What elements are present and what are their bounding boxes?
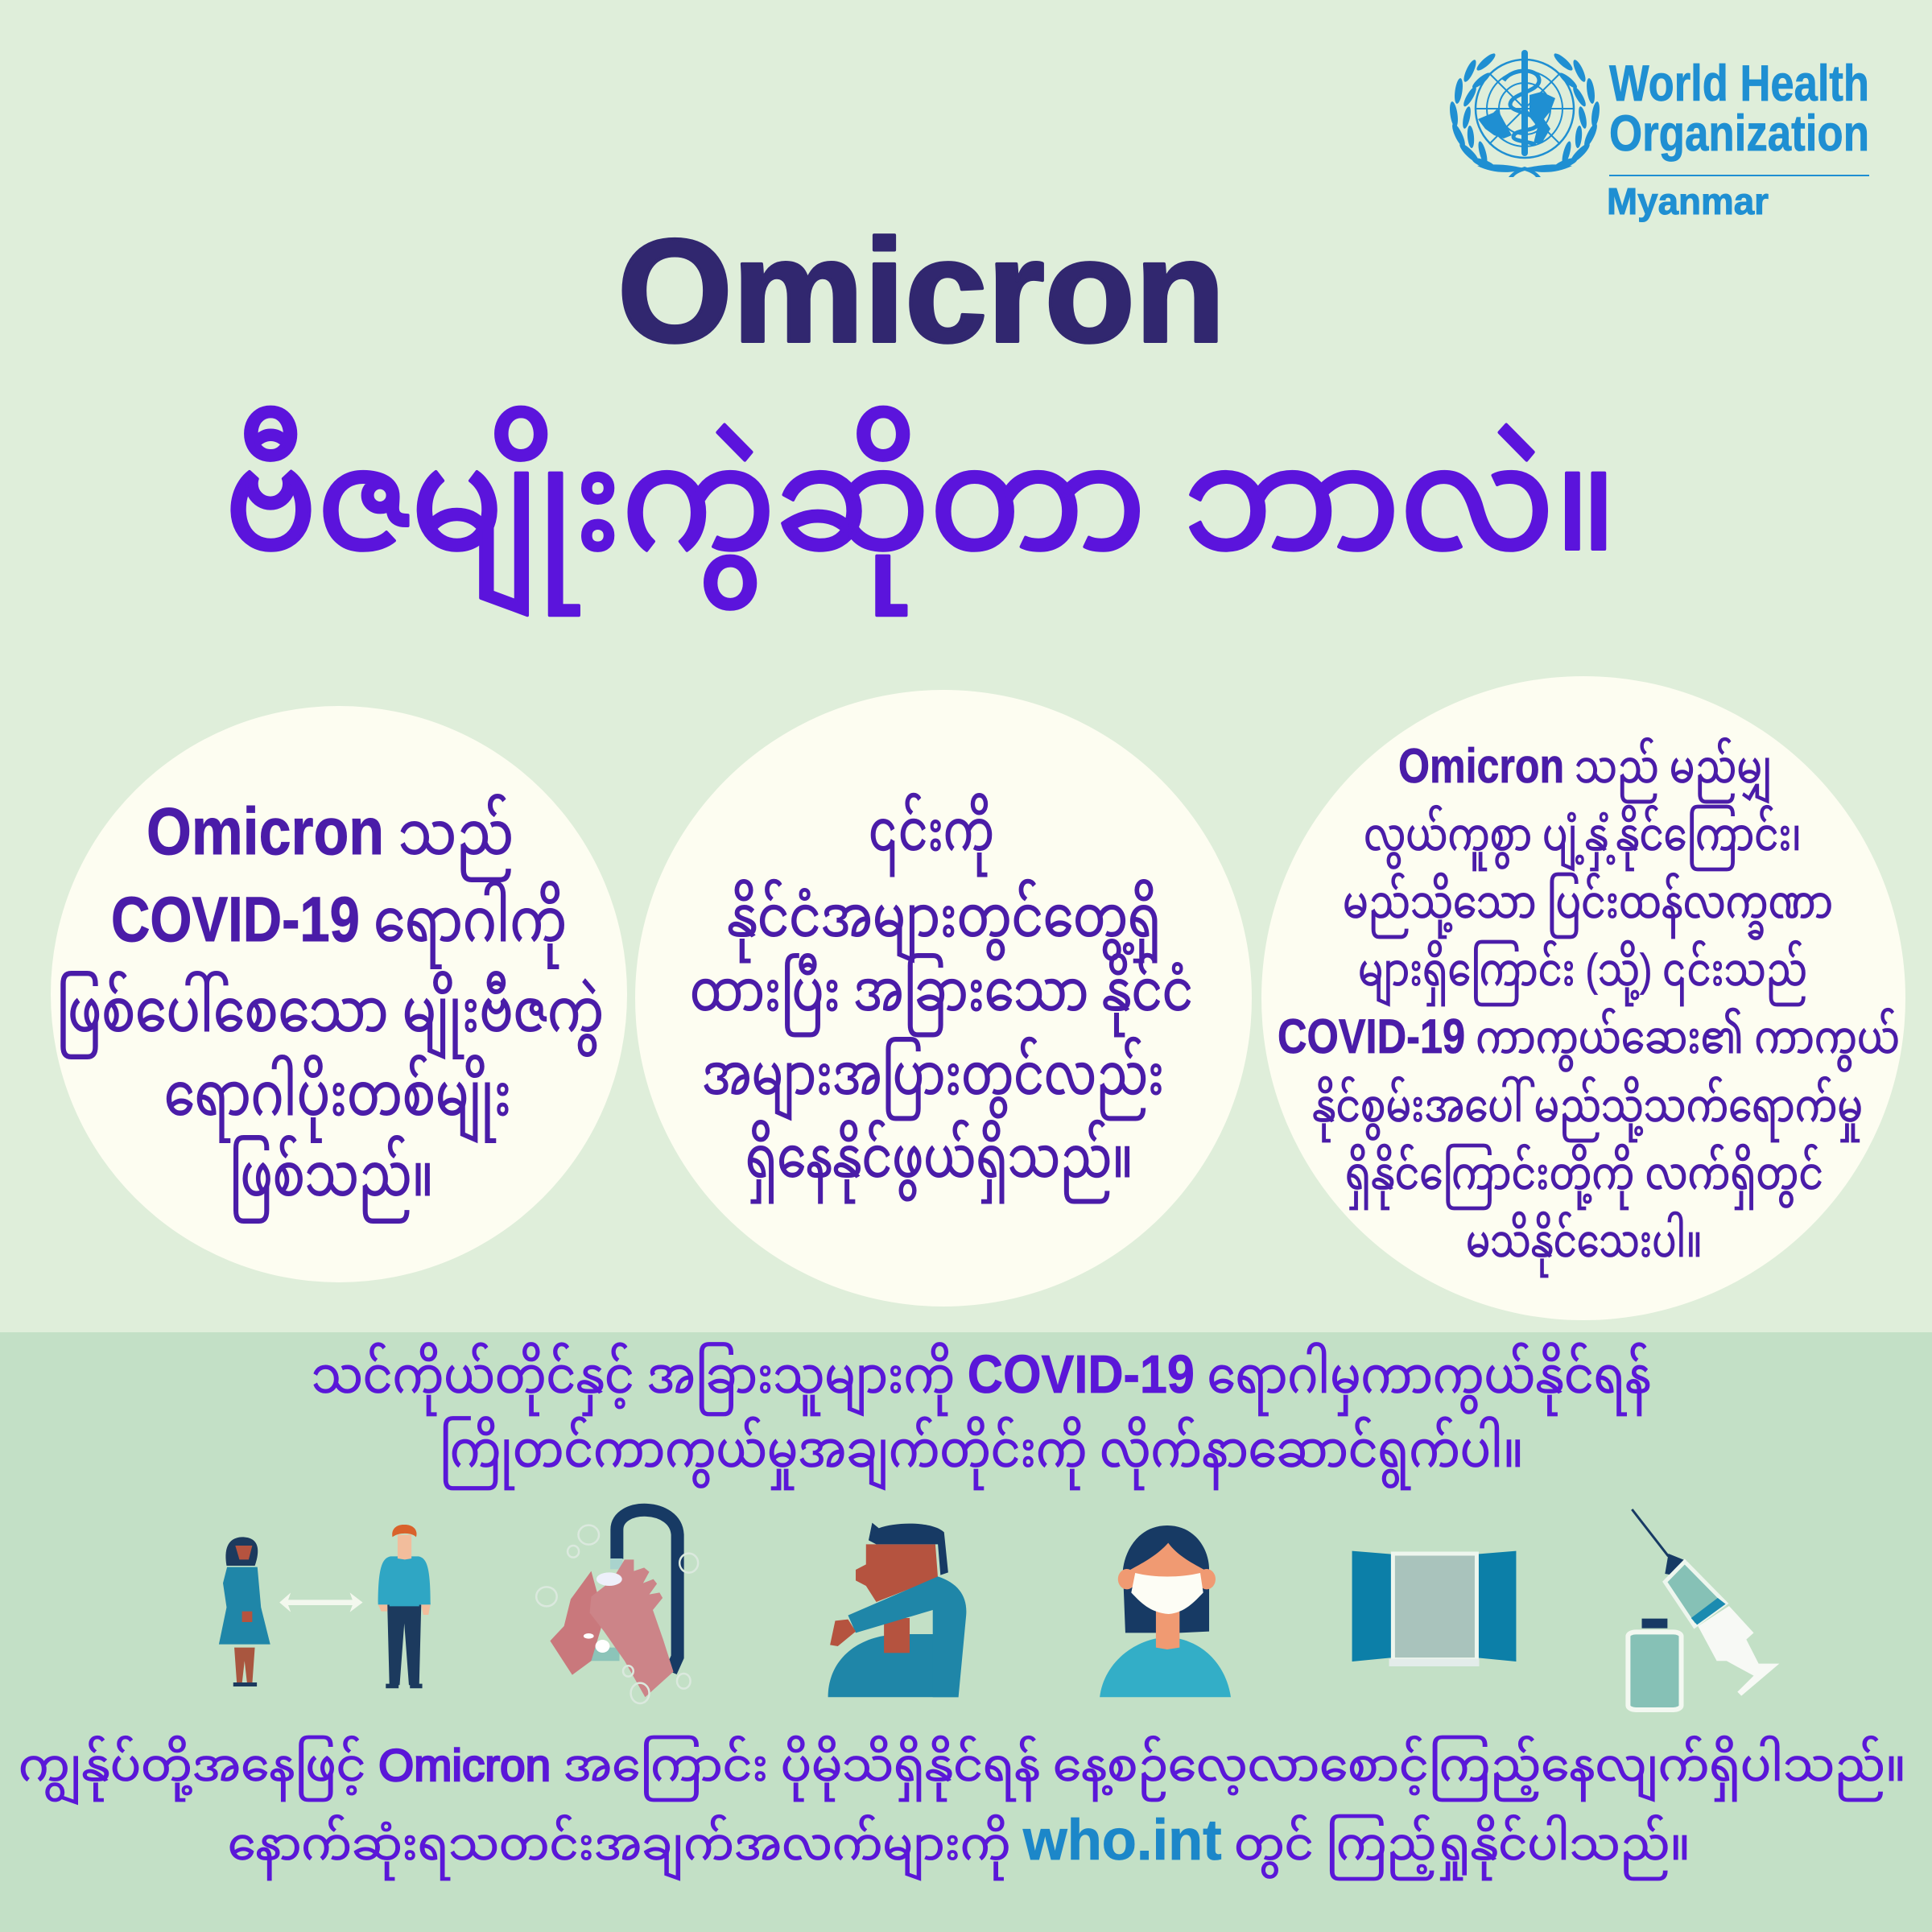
panel: circle 1 definition: ရောဂါပိုးတစ်မျိုး xyxy=(164,1054,511,1144)
heading: protect yourself: သင်ကိုယ်တိုင်နှင့် အခြားသူများကို COVID-19 ရောဂါမှကာကွယ်နိုင်ရန် xyxy=(312,1342,1651,1417)
panel: circle 1 definition: ဖြစ်သည်။ xyxy=(229,1134,434,1224)
panel: circle 3 unknowns: များရှိကြောင်း (သို့) ၎င်းသည် xyxy=(1358,939,1807,1007)
icon: hand washing xyxy=(536,1510,698,1703)
panel: circle 2 spread: အများအပြားတွင်လည်း xyxy=(702,1038,1164,1121)
icon: cough into elbow xyxy=(828,1523,966,1697)
icons row left xyxy=(219,1510,966,1703)
logo text: Myanmar: Myanmar xyxy=(1607,180,1769,222)
logo text: Organization: Organization xyxy=(1609,105,1869,162)
panel: circle 1 definition: Omicron သည် xyxy=(147,793,514,882)
panel: circle 3 unknowns xyxy=(1261,676,1905,1320)
title: Omicron xyxy=(617,208,1225,373)
panel: circle 2 spread: နိုင်ငံအများတွင်တွေ့ရှိ xyxy=(727,880,1161,963)
logo: World Health Organization Myanmar xyxy=(1448,52,1869,222)
panel: circle 1 definition xyxy=(51,706,627,1282)
icons row right xyxy=(1100,1509,1779,1710)
heading: protect yourself xyxy=(312,1342,1651,1491)
icon: WHO emblem xyxy=(1448,52,1601,177)
footer text: ကျွန်ုပ်တို့အနေဖြင့် Omicron အကြောင်း ပိုမိုသိရှိနိုင်ရန် နေ့စဉ်လေ့လာစောင့်ကြည့်နေလျက်ရှိပါသည်။ xyxy=(19,1735,1906,1806)
panel: circle 3 unknowns: ရှိနိုင်ကြောင်းတို့ကို လက်ရှိတွင် xyxy=(1345,1143,1823,1211)
panel: circle 1 definition: ဖြစ်ပေါ်စေသော မျိုးဗီဇကွဲ xyxy=(56,970,604,1060)
icon: physical distancing xyxy=(219,1525,431,1688)
footer text: နောက်ဆုံးရသတင်းအချက်အလက်များကို who.int တွင် ကြည့်ရှုနိုင်ပါသည်။ xyxy=(228,1809,1690,1881)
panel: circle 2 spread: ရှိနေနိုင်ဖွယ်ရှိသည်။ xyxy=(745,1121,1133,1203)
panel: circle 1 definition: COVID-19 ရောဂါကို xyxy=(111,880,567,969)
icon: open window xyxy=(1352,1551,1516,1666)
footer text xyxy=(19,1735,1906,1881)
panel: circle 3 unknowns: မည်သို့သော ပြင်းထန်လက္ခဏာ xyxy=(1343,872,1833,940)
panel: circle 2 spread xyxy=(635,690,1252,1307)
panel: circle 3 unknowns: မသိနိုင်သေးပါ။ xyxy=(1466,1211,1703,1278)
panel: circle 2 spread: ထားပြီး အခြားသော နိုင်ငံ xyxy=(690,954,1193,1036)
heading: protect yourself: ကြိုတင်ကာကွယ်မှုအချက်တိုင်းကို လိုက်နာဆောင်ရွက်ပါ။ xyxy=(440,1416,1524,1491)
panel: circle 3 unknowns: လွယ်ကူစွာ ပျံ့နှံ့နိုင်ကြောင်း၊ xyxy=(1364,804,1802,872)
subtitle: ဗီဇမျိုးကွဲဆိုတာ ဘာလဲ။ xyxy=(225,407,1617,616)
icon: vaccine syringe and vial xyxy=(1628,1509,1779,1710)
panel: circle 2 spread: ၎င်းကို xyxy=(869,794,994,876)
logo text: World Health: World Health xyxy=(1609,56,1869,112)
icon: face mask xyxy=(1100,1525,1231,1697)
panel: circle 3 unknowns: Omicron သည် မည်မျှ xyxy=(1398,737,1772,804)
